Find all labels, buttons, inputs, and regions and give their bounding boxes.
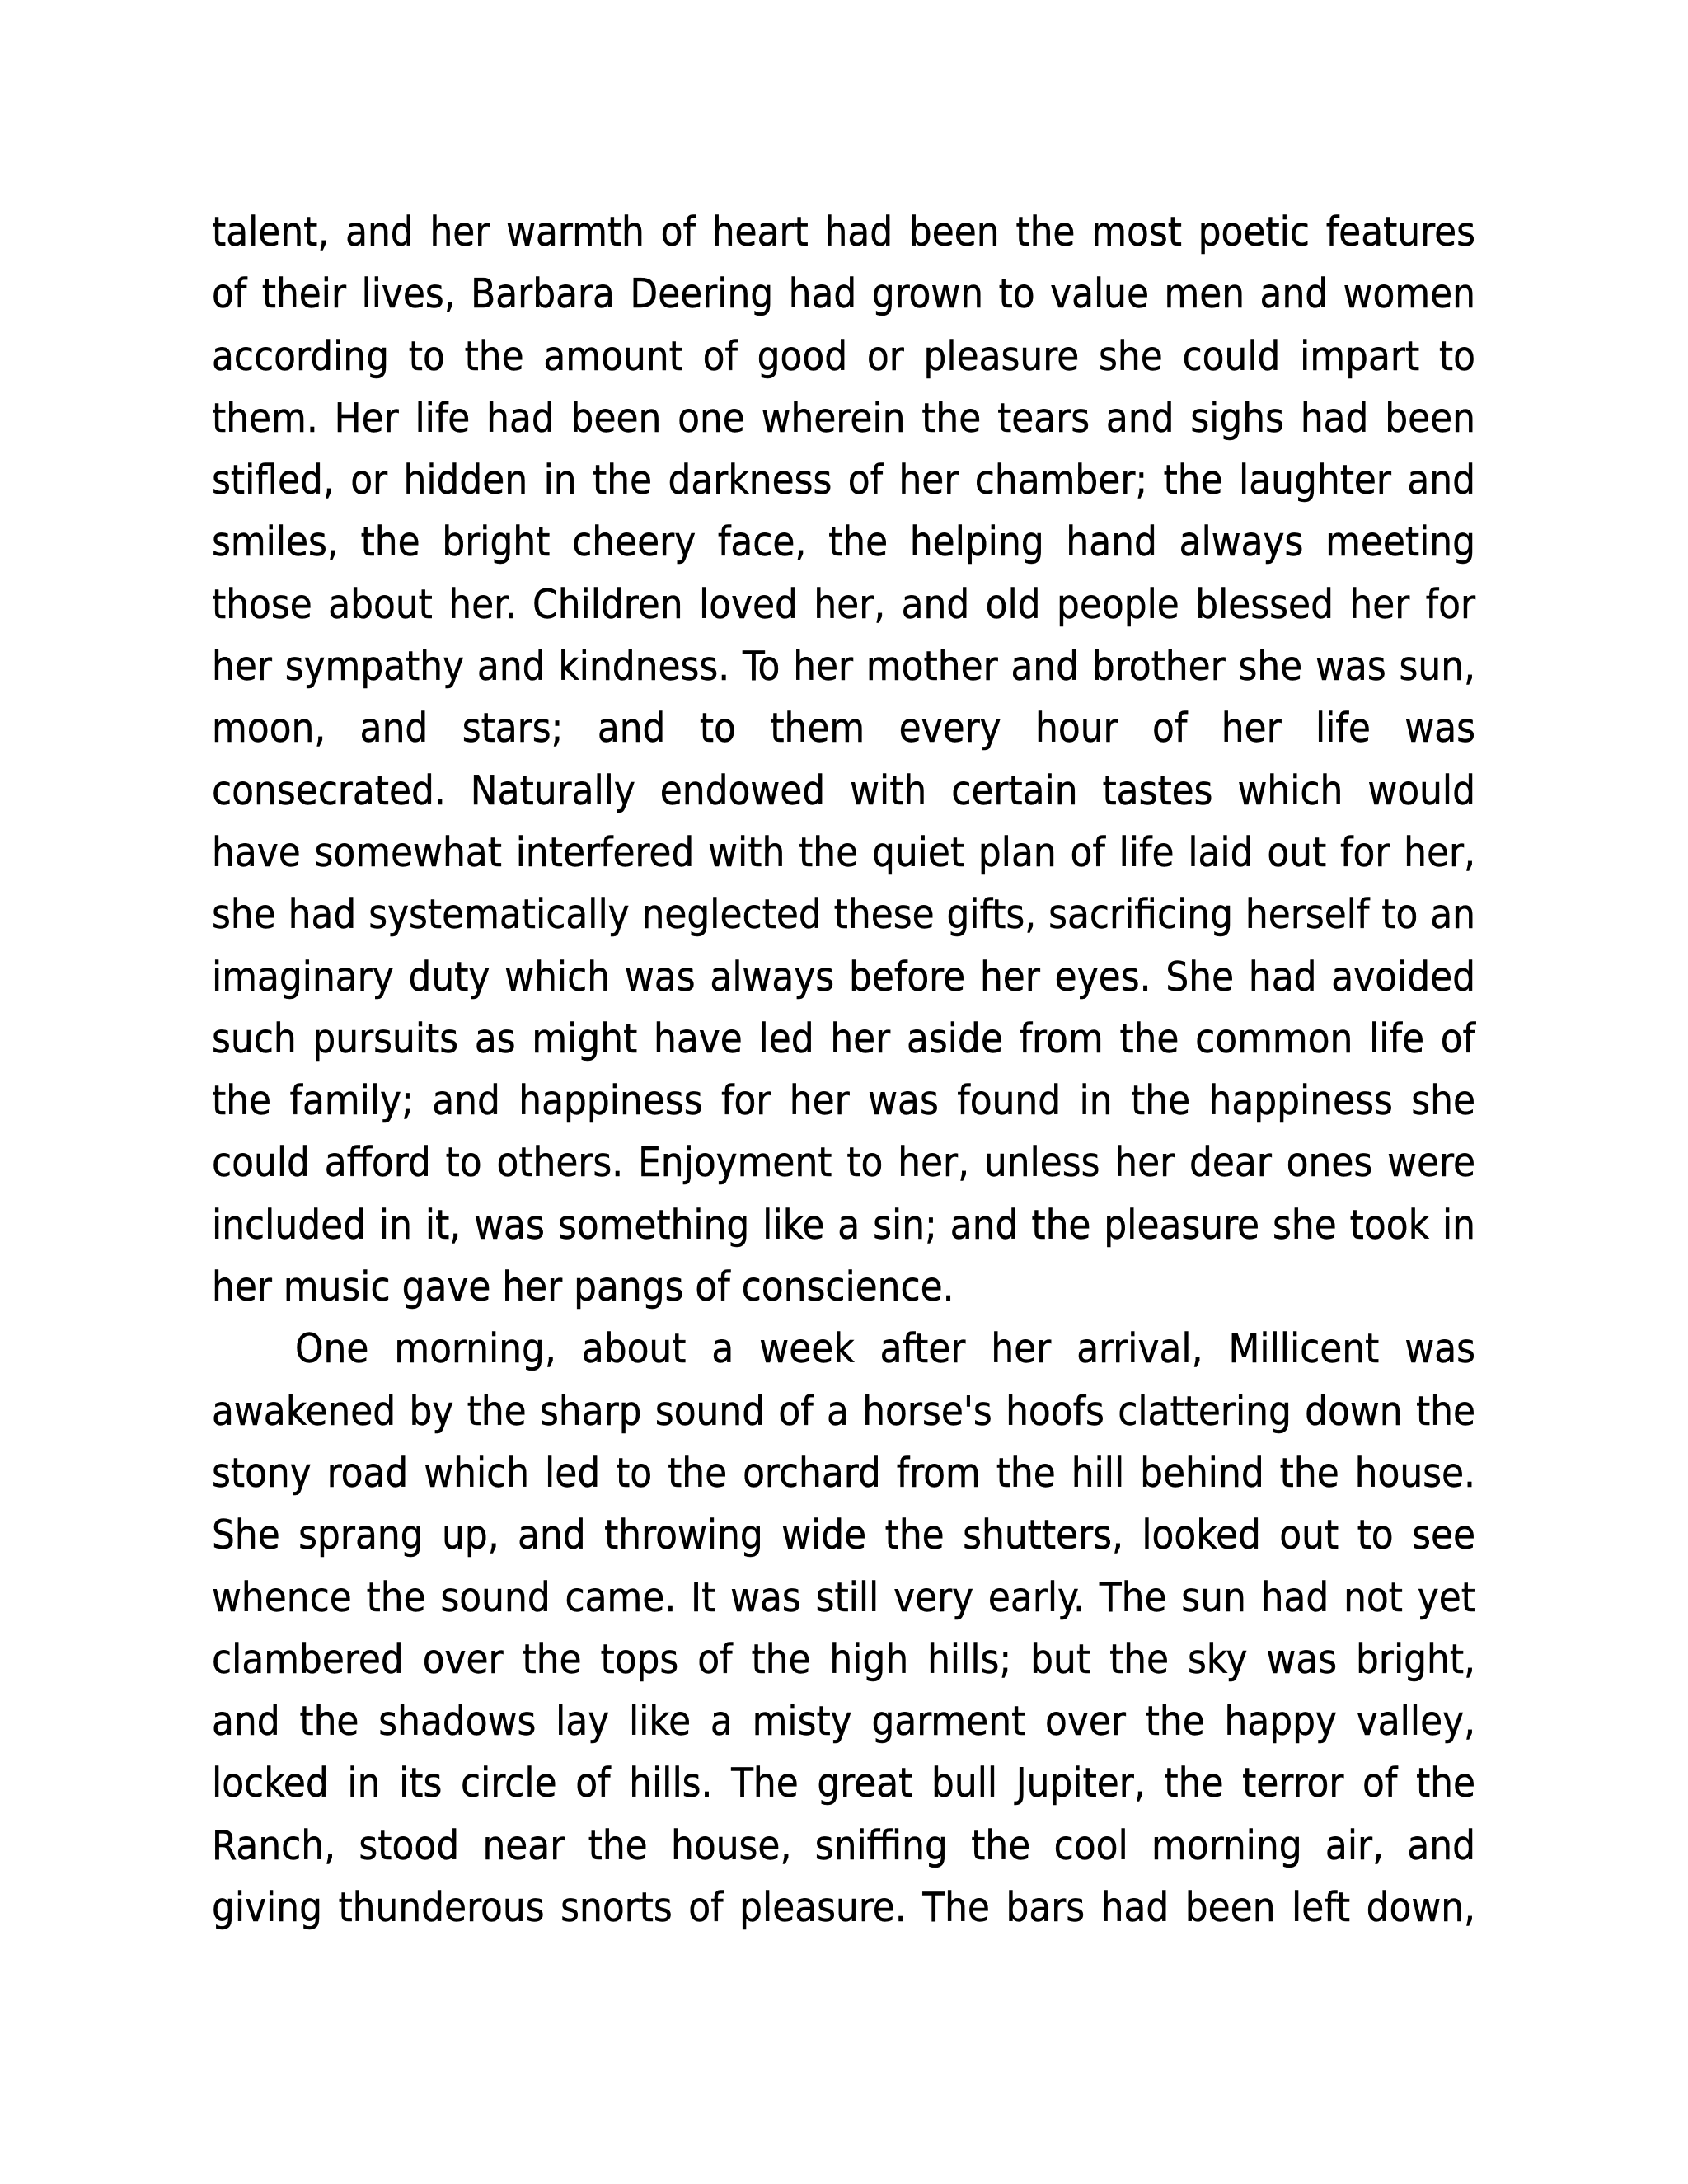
text block: second paragraph: She sprang up, and throwing wide the shutters, looked out to see xyxy=(212,1511,1475,1558)
text block: first paragraph: according to the amount of good or pleasure she could impart to xyxy=(212,333,1475,380)
text block: first paragraph: consecrated. Naturally endowed with certain tastes which would xyxy=(212,767,1475,814)
text block: second paragraph: One morning, about a week after her arrival, Millicent was xyxy=(295,1325,1475,1372)
text block: second paragraph: whence the sound came. It was still very early. The sun had not yet xyxy=(212,1574,1475,1621)
text block: first paragraph: those about her. Children loved her, and old people blessed her for xyxy=(212,581,1475,628)
text block: first paragraph: included in it, was something like a sin; and the pleasure she took in xyxy=(212,1202,1475,1249)
text block: first paragraph: have somewhat interfered with the quiet plan of life laid out for her, xyxy=(212,829,1475,876)
text block: first paragraph: talent, and her warmth of heart had been the most poetic features xyxy=(212,209,1475,255)
text block: second paragraph: clambered over the tops of the high hills; but the sky was bright, xyxy=(212,1636,1475,1683)
text block: first paragraph: could afford to others. Enjoyment to her, unless her dear ones were xyxy=(212,1139,1475,1186)
text block: second paragraph: locked in its circle of hills. The great bull Jupiter, the terror of the xyxy=(212,1760,1475,1807)
text block: first paragraph: moon, and stars; and to them every hour of her life was xyxy=(212,705,1475,752)
text block: first paragraph: stifled, or hidden in the darkness of her chamber; the laughter and xyxy=(212,457,1475,504)
text block: second paragraph: Ranch, stood near the house, sniffing the cool morning air, and xyxy=(212,1822,1475,1869)
text block: first paragraph: imaginary duty which was always before her eyes. She had avoided xyxy=(212,954,1475,1001)
text block: first paragraph: smiles, the bright cheery face, the helping hand always meeting xyxy=(212,518,1475,565)
text block: first paragraph: her sympathy and kindness. To her mother and brother she was sun, xyxy=(212,643,1475,690)
text block: second paragraph xyxy=(212,1325,1475,1931)
text block: first paragraph: of their lives, Barbara Deering had grown to value men and women xyxy=(212,270,1475,317)
text block: first paragraph xyxy=(212,209,1476,1310)
text block: second paragraph: giving thunderous snorts of pleasure. The bars had been left down, xyxy=(212,1884,1475,1931)
text block: second paragraph: awakened by the sharp sound of a horse's hoofs clattering down the xyxy=(212,1388,1475,1435)
text block: first paragraph: the family; and happiness for her was found in the happiness she xyxy=(212,1077,1475,1124)
text block: second paragraph: stony road which led to the orchard from the hill behind the house. xyxy=(212,1450,1475,1497)
text block: first paragraph: such pursuits as might have led her aside from the common life of xyxy=(212,1015,1475,1062)
text block: second paragraph: and the shadows lay like a misty garment over the happy valley, xyxy=(212,1698,1475,1745)
text block: first paragraph: she had systematically neglected these gifts, sacrificing herself to an xyxy=(212,891,1475,938)
text block: first paragraph: them. Her life had been one wherein the tears and sighs had been xyxy=(212,395,1475,442)
text block: first paragraph: her music gave her pangs of conscience. xyxy=(212,1263,954,1310)
